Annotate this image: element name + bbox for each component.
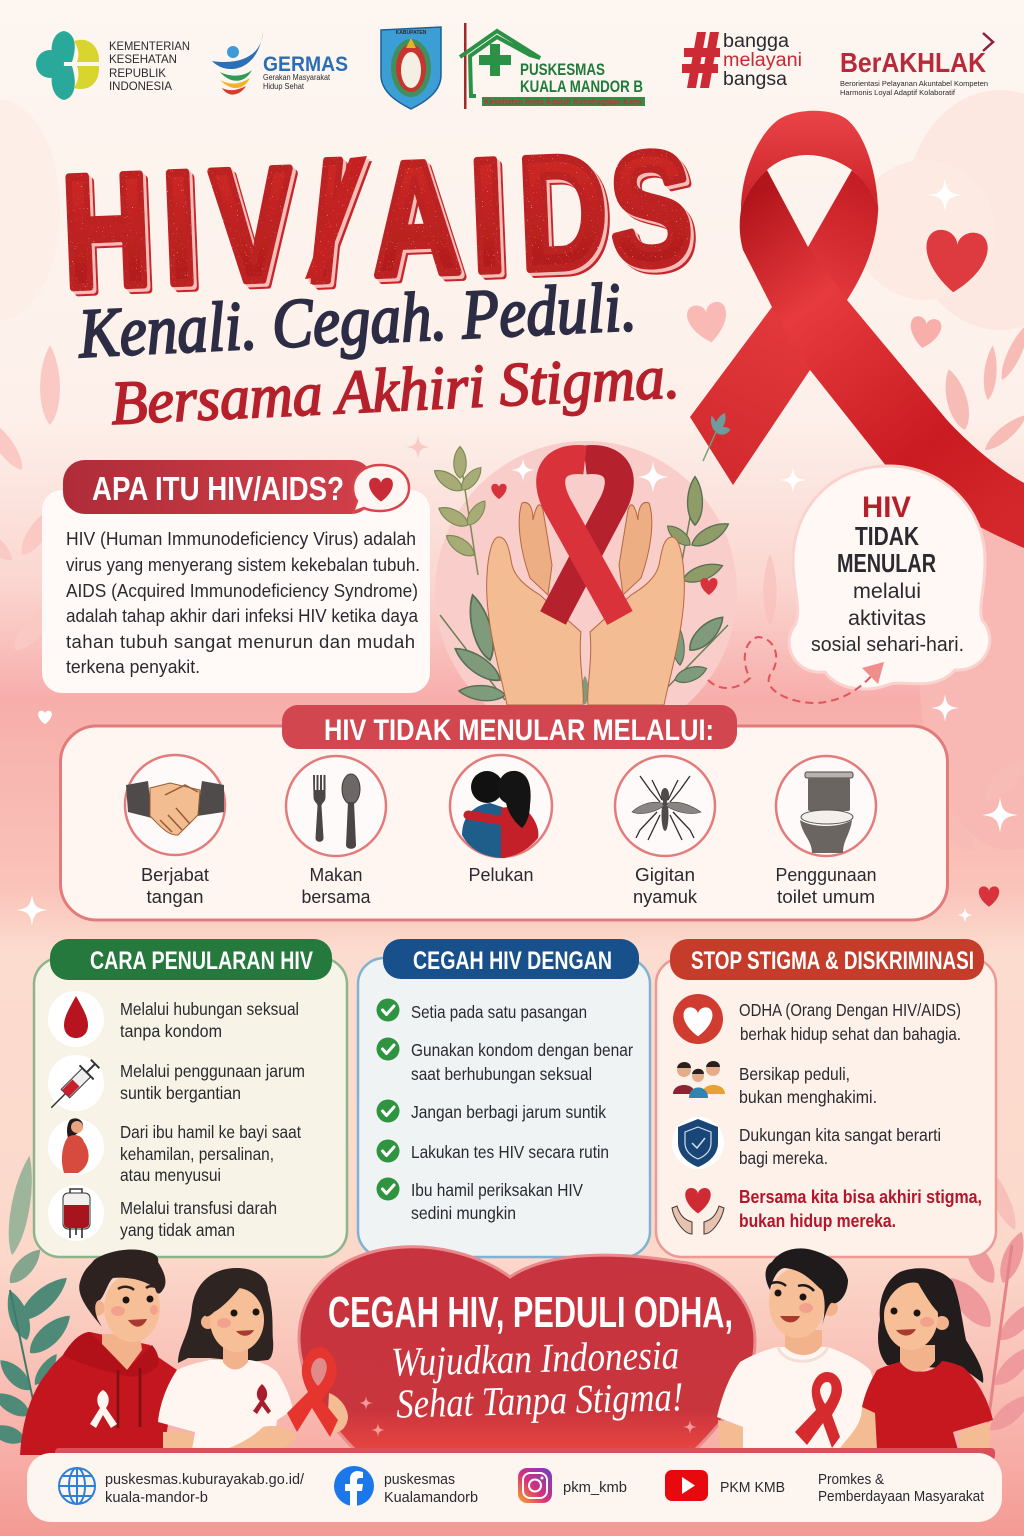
- promkes text: [818, 1471, 985, 1505]
- logo: Germas: [212, 32, 348, 95]
- text: bagi mereka.: [739, 1148, 828, 1168]
- icon: toilet: [776, 756, 876, 856]
- sparkles: [16, 435, 1018, 926]
- body text: terkena penyakit.: [66, 656, 200, 677]
- text: [120, 999, 299, 1041]
- facebook text: [384, 1471, 478, 1506]
- logo: shield: [381, 27, 441, 109]
- text: [120, 1061, 305, 1103]
- facebook text: puskesmas: [384, 1471, 455, 1488]
- logo: Puskesmas Kuala Mandor B: [460, 23, 645, 109]
- heading pill: [383, 939, 639, 979]
- logo: bangga melayani bangsa: bangga: [723, 31, 789, 52]
- website text: puskesmas.kuburayakab.go.id/: [105, 1471, 305, 1488]
- text: Bersikap peduli,: [739, 1064, 850, 1084]
- promkes text: Promkes &: [818, 1471, 884, 1488]
- text: bukan hidup mereka.: [739, 1211, 896, 1231]
- text list: [411, 1002, 633, 1223]
- body text: HIV (Human Immunodeficiency Virus) adalah: [66, 528, 416, 549]
- icon: syringe: [44, 1055, 104, 1115]
- youtube text: PKM KMB: [720, 1479, 785, 1496]
- label: Penggunaan: [776, 865, 876, 885]
- heading pill: [50, 939, 332, 980]
- callout: HIV tidak menular cloud: MENULAR: [837, 548, 936, 578]
- logo: BerAKHLAK: Berorientasi Pelayanan Akuntabel Kompeten: [840, 79, 988, 88]
- text: atau menyusui: [120, 1165, 221, 1185]
- icon: people: [673, 1061, 725, 1098]
- label: Berjabat: [141, 865, 209, 885]
- heart banner: [299, 1247, 755, 1450]
- checklist: [376, 998, 400, 1200]
- promkes text: Pemberdayaan Masyarakat: [818, 1488, 985, 1505]
- text: Dukungan kita sangat berarti: [739, 1125, 941, 1145]
- text: Bersama kita bisa akhiri stigma,: [739, 1187, 982, 1207]
- logo: Germas: Gerakan Masyarakat: [263, 73, 331, 82]
- heading pill: [282, 705, 737, 749]
- logo: Kementerian Kesehatan: KEMENTERIAN: [109, 39, 190, 53]
- icon: youtube: [665, 1470, 708, 1501]
- icon: blood bag: [48, 1185, 104, 1241]
- panel: apa itu HIV/AIDS: [42, 460, 430, 693]
- logo: shield: KABUPATEN: [396, 30, 427, 36]
- text: yang tidak aman: [120, 1220, 235, 1240]
- panel: HIV tidak menular melalui: [60, 705, 948, 920]
- text: ODHA (Orang Dengan HIV/AIDS): [739, 1000, 961, 1020]
- slogan script: Sehat Tanpa Stigma!: [396, 1373, 684, 1427]
- subtitle: Bersama Akhiri Stigma: Bersama Akhiri Stigma.: [109, 343, 681, 438]
- label: nyamuk: [633, 887, 698, 907]
- illustration: boy with red hoodie: [20, 1249, 177, 1455]
- text: [120, 1198, 277, 1240]
- text: [739, 1125, 941, 1168]
- label: bersama: [302, 887, 371, 907]
- icon: fork and spoon: [286, 756, 386, 856]
- illustration: girl with red shirt: [840, 1268, 993, 1450]
- instagram text: pkm_kmb: [563, 1479, 627, 1496]
- arrow: dashed loop: [708, 637, 884, 703]
- body text: adalah tahap akhir dari infeksi HIV ketika daya: [66, 605, 419, 626]
- text list: Gunakan kondom dengan benar: [411, 1040, 633, 1060]
- facebook text: Kualamandorb: [384, 1489, 478, 1506]
- logo: Puskesmas Kuala Mandor B: PUSKESMAS: [520, 60, 605, 79]
- logo: BerAKHLAK: [840, 33, 993, 97]
- illustration: boy with white shirt: [717, 1248, 874, 1450]
- logo: bangga melayani bangsa: [682, 31, 802, 90]
- text: suntik bergantian: [120, 1083, 241, 1103]
- logo: BerAKHLAK: BerAKHLAK: [840, 47, 986, 78]
- website text: kuala-mandor-b: [105, 1489, 208, 1506]
- logo: Germas: Hidup Sehat: [263, 82, 305, 91]
- logo: Kementerian Kesehatan: [36, 31, 190, 100]
- icon: facebook: [334, 1466, 374, 1506]
- text: Melalui hubungan seksual: [120, 999, 299, 1019]
- text list: sedini mungkin: [411, 1203, 516, 1223]
- text list: Lakukan tes HIV secara rutin: [411, 1142, 609, 1162]
- logo: Kementerian Kesehatan: KESEHATAN: [109, 52, 177, 66]
- callout: HIV tidak menular cloud: [789, 466, 990, 689]
- icon: pregnant woman: [48, 1118, 104, 1175]
- footer bar: [27, 1448, 1002, 1522]
- text: Melalui penggunaan jarum: [120, 1061, 305, 1081]
- label: [141, 865, 209, 907]
- text: [739, 1000, 961, 1044]
- logo: Kementerian Kesehatan: REPUBLIK: [109, 66, 166, 80]
- callout: HIV tidak menular cloud: aktivitas: [848, 607, 926, 630]
- panel: stop stigma: [656, 939, 996, 1257]
- icon: handshake: [125, 755, 225, 855]
- label: Gigitan: [635, 865, 695, 885]
- icon: hug: [450, 755, 552, 858]
- heading pill: APA ITU HIV/AIDS?: [92, 470, 344, 507]
- text: bukan menghakimi.: [739, 1087, 877, 1107]
- logo: Kementerian Kesehatan: INDONESIA: [109, 79, 172, 93]
- label: toilet umum: [777, 887, 875, 907]
- leaf pin: [703, 411, 731, 461]
- text list: Setia pada satu pasangan: [411, 1002, 587, 1022]
- panel: cegah HIV dengan: [358, 939, 650, 1257]
- logo: Puskesmas Kuala Mandor B: KUALA MANDOR B: [520, 77, 643, 96]
- text list: Ibu hamil periksakan HIV: [411, 1180, 583, 1200]
- title: HIV/AIDS: HIV/AIDS: [59, 118, 695, 323]
- heading pill: [63, 460, 373, 514]
- heading pill: CEGAH HIV DENGAN: [413, 947, 612, 975]
- callout: HIV tidak menular cloud: sosial sehari-hari.: [811, 634, 964, 656]
- label: Makan: [310, 865, 362, 885]
- hearts and sparkles by ribbon: [686, 178, 989, 493]
- label: Pelukan: [468, 865, 534, 885]
- icon: instagram: [518, 1468, 552, 1503]
- logo: bangga melayani bangsa: melayani: [723, 50, 802, 71]
- text list: Jangan berbagi jarum suntik: [411, 1102, 606, 1122]
- icon: held ribbon: [287, 1347, 348, 1437]
- text: kehamilan, persalinan,: [120, 1144, 274, 1164]
- text list: saat berhubungan seksual: [411, 1064, 592, 1084]
- subtitle: Kenali Cegah Peduli: Kenali. Cegah. Peduli.: [76, 269, 638, 373]
- icon: blood drop: [48, 991, 104, 1047]
- logo: bangga melayani bangsa: bangsa: [723, 69, 787, 90]
- body text: tahan tubuh sangat menurun dan mudah: [66, 631, 415, 652]
- icon: globe: [59, 1468, 95, 1504]
- text: Melalui transfusi darah: [120, 1198, 277, 1218]
- heading pill: HIV TIDAK MENULAR MELALUI:: [324, 714, 714, 747]
- heading pill: [670, 939, 984, 980]
- panel: cara penularan HIV: [34, 939, 347, 1257]
- icon: heart circle: [673, 994, 723, 1044]
- logo: BerAKHLAK: Harmonis Loyal Adaptif Kolaboratif: [840, 88, 956, 97]
- label: [776, 865, 876, 907]
- heading pill: CARA PENULARAN HIV: [90, 947, 313, 975]
- slogan script: Wujudkan Indonesia: [391, 1331, 680, 1385]
- label: [633, 865, 698, 907]
- slogan: CEGAH HIV, PEDULI ODHA,: [328, 1288, 733, 1337]
- logo: Germas: GERMAS: [263, 53, 348, 76]
- illustration: hands holding ribbon: [431, 441, 737, 743]
- label: [302, 865, 371, 907]
- icon: mosquito: [615, 756, 715, 856]
- text: Dari ibu hamil ke bayi saat: [120, 1122, 301, 1142]
- logo: Puskesmas Kuala Mandor B: Kesehatan Anda Adalah Kebahagiaan Kami: [484, 98, 642, 106]
- text: [739, 1064, 877, 1107]
- callout: HIV tidak menular cloud: HIV: [862, 491, 911, 524]
- icon: hands with heart: [672, 1188, 724, 1234]
- text: [120, 1122, 301, 1185]
- label: tangan: [146, 887, 204, 907]
- slogan script: [391, 1331, 684, 1427]
- icon: shield: [672, 1117, 724, 1169]
- icon: speech bubble heart: [353, 465, 409, 512]
- callout: HIV tidak menular cloud: TIDAK: [855, 521, 919, 551]
- text: tanpa kondom: [120, 1021, 222, 1041]
- body text: virus yang menyerang sistem kekebalan tubuh.: [66, 554, 420, 575]
- callout: HIV tidak menular cloud: melalui: [853, 580, 921, 603]
- text: berhak hidup sehat dan bahagia.: [740, 1024, 961, 1044]
- website text: [105, 1471, 305, 1506]
- illustration: girl with white shirt: [158, 1268, 297, 1455]
- body text: [66, 528, 420, 677]
- body text: AIDS (Acquired Immunodeficiency Syndrome): [66, 580, 418, 601]
- text: [739, 1187, 982, 1231]
- big red ribbon: [690, 111, 1024, 548]
